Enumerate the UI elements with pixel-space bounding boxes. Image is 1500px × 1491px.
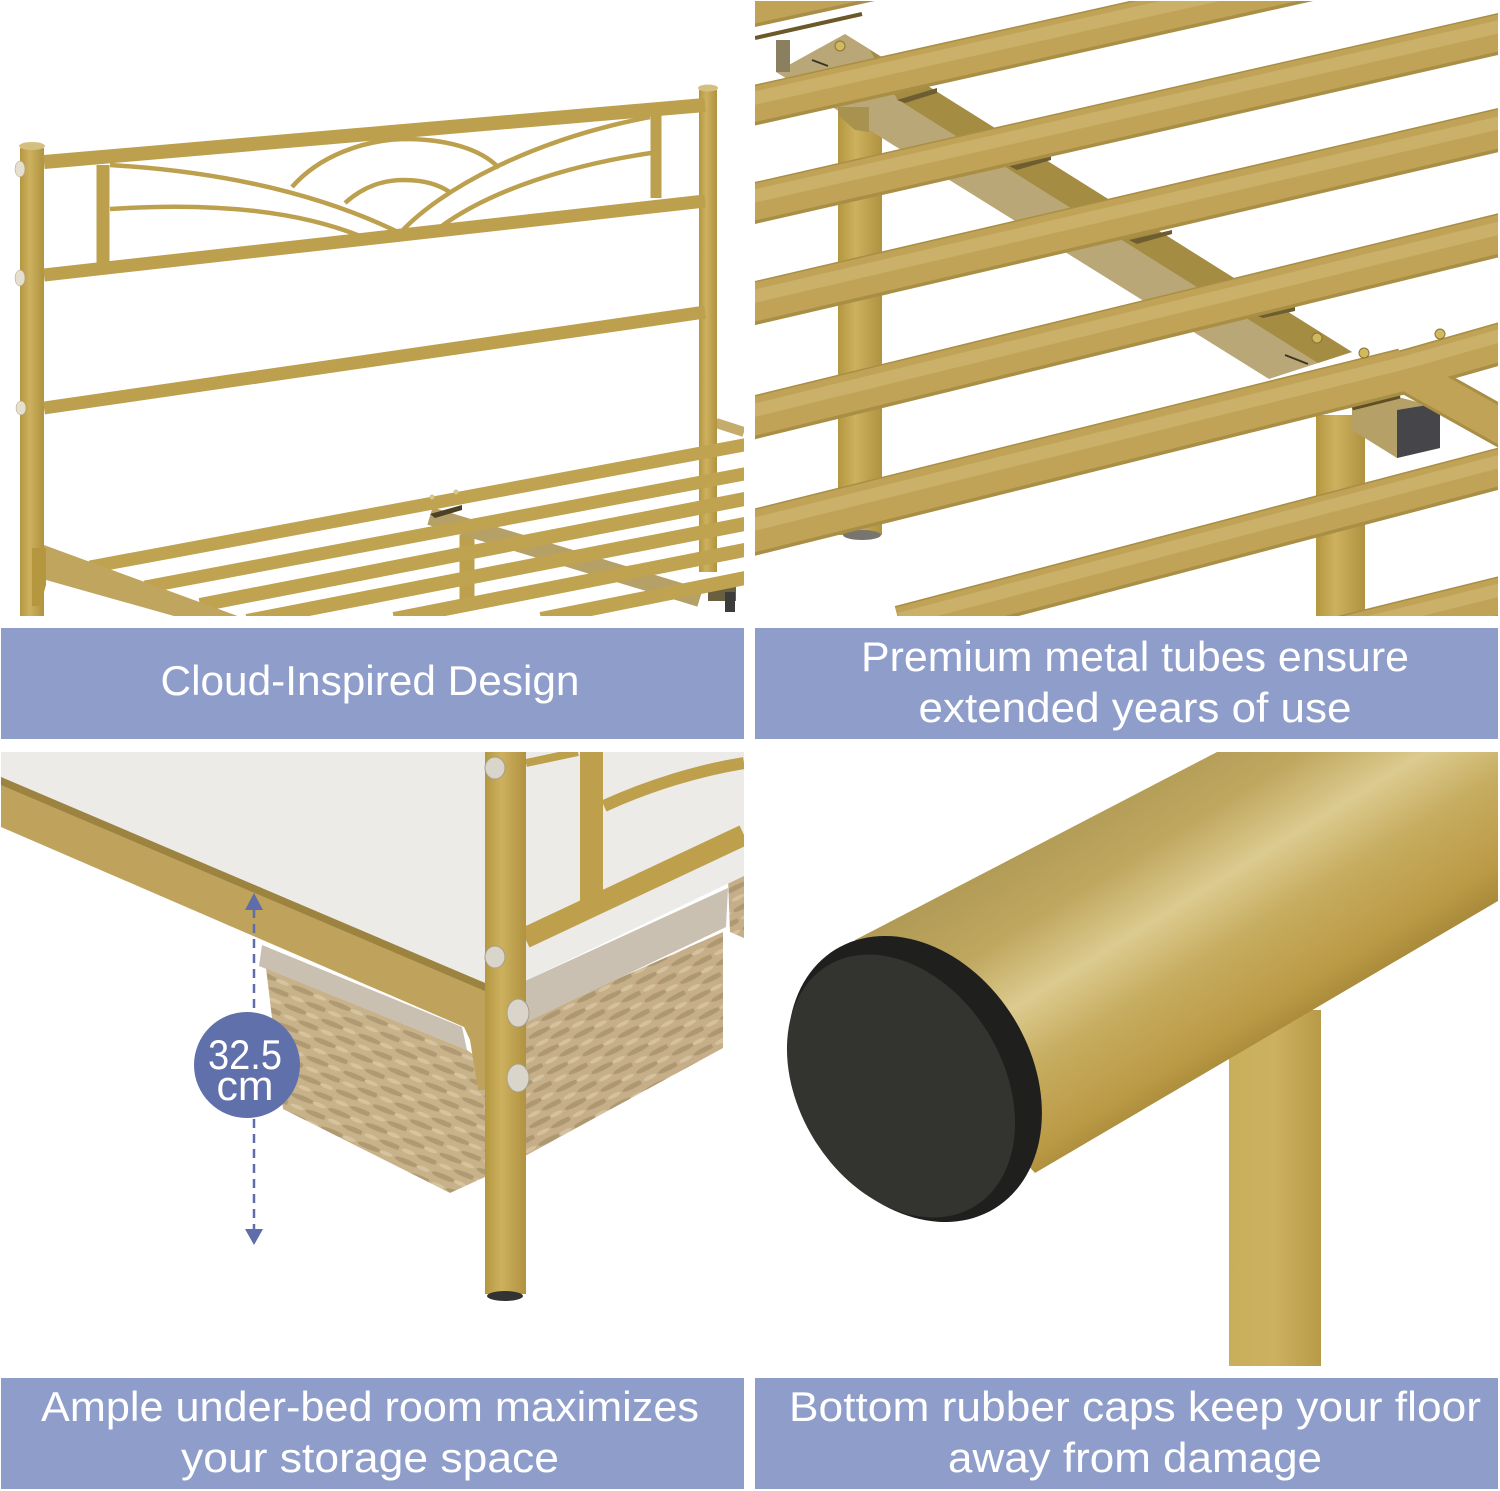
bed post xyxy=(485,752,526,1301)
bed slats xyxy=(90,442,760,621)
headboard rails xyxy=(525,752,744,938)
height badge: cm xyxy=(216,1062,274,1109)
panel: rubber cap close-up xyxy=(737,752,1498,1366)
storage basket xyxy=(259,872,744,1193)
gold tubes body xyxy=(735,0,1500,636)
panel: metal tube slats close-up xyxy=(735,0,1500,637)
mattress xyxy=(1,752,744,985)
caption: under-bed room: your storage space xyxy=(181,1434,559,1481)
bar shadows xyxy=(897,88,1295,318)
caption: cloud-inspired design xyxy=(1,628,744,739)
leg xyxy=(1229,1010,1321,1366)
screws and bracket xyxy=(755,14,1445,364)
caption: premium metal tubes: extended years of use xyxy=(918,684,1352,731)
panel: under-bed storage xyxy=(1,752,744,1301)
caption: premium metal tubes: Premium metal tubes ensure xyxy=(861,633,1409,680)
far leg and support beam xyxy=(430,423,744,612)
slat bracket xyxy=(430,490,462,518)
caption: under-bed room: Ample under-bed room maximizes xyxy=(41,1383,699,1430)
gold tubes highlight xyxy=(735,0,1500,630)
height dimension arrow xyxy=(245,893,263,1245)
headboard posts xyxy=(19,84,718,618)
center support bar xyxy=(776,34,1352,379)
caption: rubber caps: away from damage xyxy=(948,1434,1322,1481)
caption: rubber caps xyxy=(755,1378,1498,1489)
panel: cloud-inspired headboard xyxy=(14,84,744,616)
height badge: 32.5 xyxy=(208,1031,282,1078)
caption: under-bed room xyxy=(1,1378,744,1489)
headboard rails and sunrise curves xyxy=(44,105,705,408)
side rail xyxy=(39,545,243,618)
headboard bolts xyxy=(15,161,26,415)
rubber cap xyxy=(786,936,1042,1222)
gold tube xyxy=(855,752,1498,1173)
rubber block and bracket xyxy=(1352,396,1440,458)
height badge xyxy=(194,1012,300,1118)
corner bracket xyxy=(32,548,46,606)
gold tubes base xyxy=(735,0,1500,637)
side rail xyxy=(1,777,485,1090)
caption: cloud-inspired design: Cloud-Inspired Design xyxy=(160,657,580,704)
legs xyxy=(838,110,1365,620)
bolts xyxy=(485,757,529,1092)
caption: rubber caps: Bottom rubber caps keep your floor xyxy=(789,1383,1481,1430)
caption: premium metal tubes xyxy=(755,628,1498,739)
